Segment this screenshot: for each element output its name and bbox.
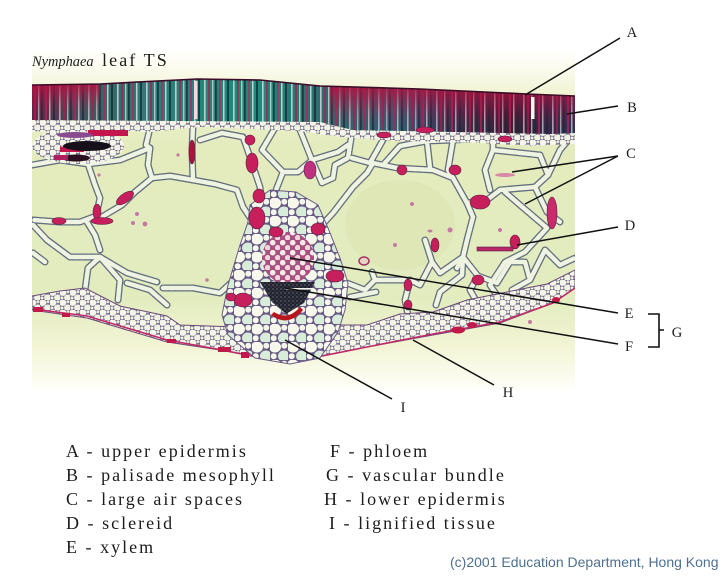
callout letters: E [625, 306, 634, 322]
callout letters: D [625, 218, 635, 234]
key: left column: E - xylem [66, 537, 155, 557]
dark cluster of sclerenchyma [32, 128, 128, 164]
photomicrograph panel [32, 48, 575, 393]
callout letters: A [627, 25, 638, 41]
leader lines [285, 38, 620, 399]
key: right column: I - lignified tissue [329, 513, 497, 533]
title [31, 50, 169, 70]
title: Nymphaea [31, 54, 94, 70]
air-space tint [345, 180, 455, 270]
palisade mesophyll layer [32, 79, 575, 134]
cell row beneath the palisade [32, 120, 575, 146]
callout letters: H [503, 385, 514, 401]
key: left column [66, 441, 276, 557]
key: left column: B - palisade mesophyll [66, 465, 276, 485]
key: left column: D - sclereid [66, 513, 174, 533]
callout letters: F [625, 339, 633, 355]
copyright: (c)2001 Education Department, Hong Kong [450, 554, 718, 570]
midrib parenchyma [222, 190, 348, 364]
callout letters: B [627, 100, 637, 116]
callout letters: C [626, 146, 636, 162]
vascular bundle ring with xylem and phloem [260, 232, 315, 320]
key: left column: A - upper epidermis [66, 441, 248, 461]
cell walls between large air spaces [32, 125, 575, 315]
crimson epidermal cells [33, 288, 575, 363]
crimson sclerenchyma cells [52, 127, 557, 310]
title: leaf TS [102, 50, 169, 70]
small scattered idioblasts [97, 153, 532, 324]
key: left column: C - large air spaces [66, 489, 244, 509]
callout letters: G [672, 325, 683, 341]
photo background [32, 48, 575, 393]
key: right column [324, 441, 507, 533]
key: right column: G - vascular bundle [326, 465, 506, 485]
callout letters [401, 25, 683, 416]
lower epidermis cell band [32, 270, 575, 363]
bracket grouping E and F [648, 314, 664, 347]
key: right column: F - phloem [330, 441, 429, 461]
key: right column: H - lower epidermis [324, 489, 507, 509]
callout letters: I [401, 400, 406, 416]
